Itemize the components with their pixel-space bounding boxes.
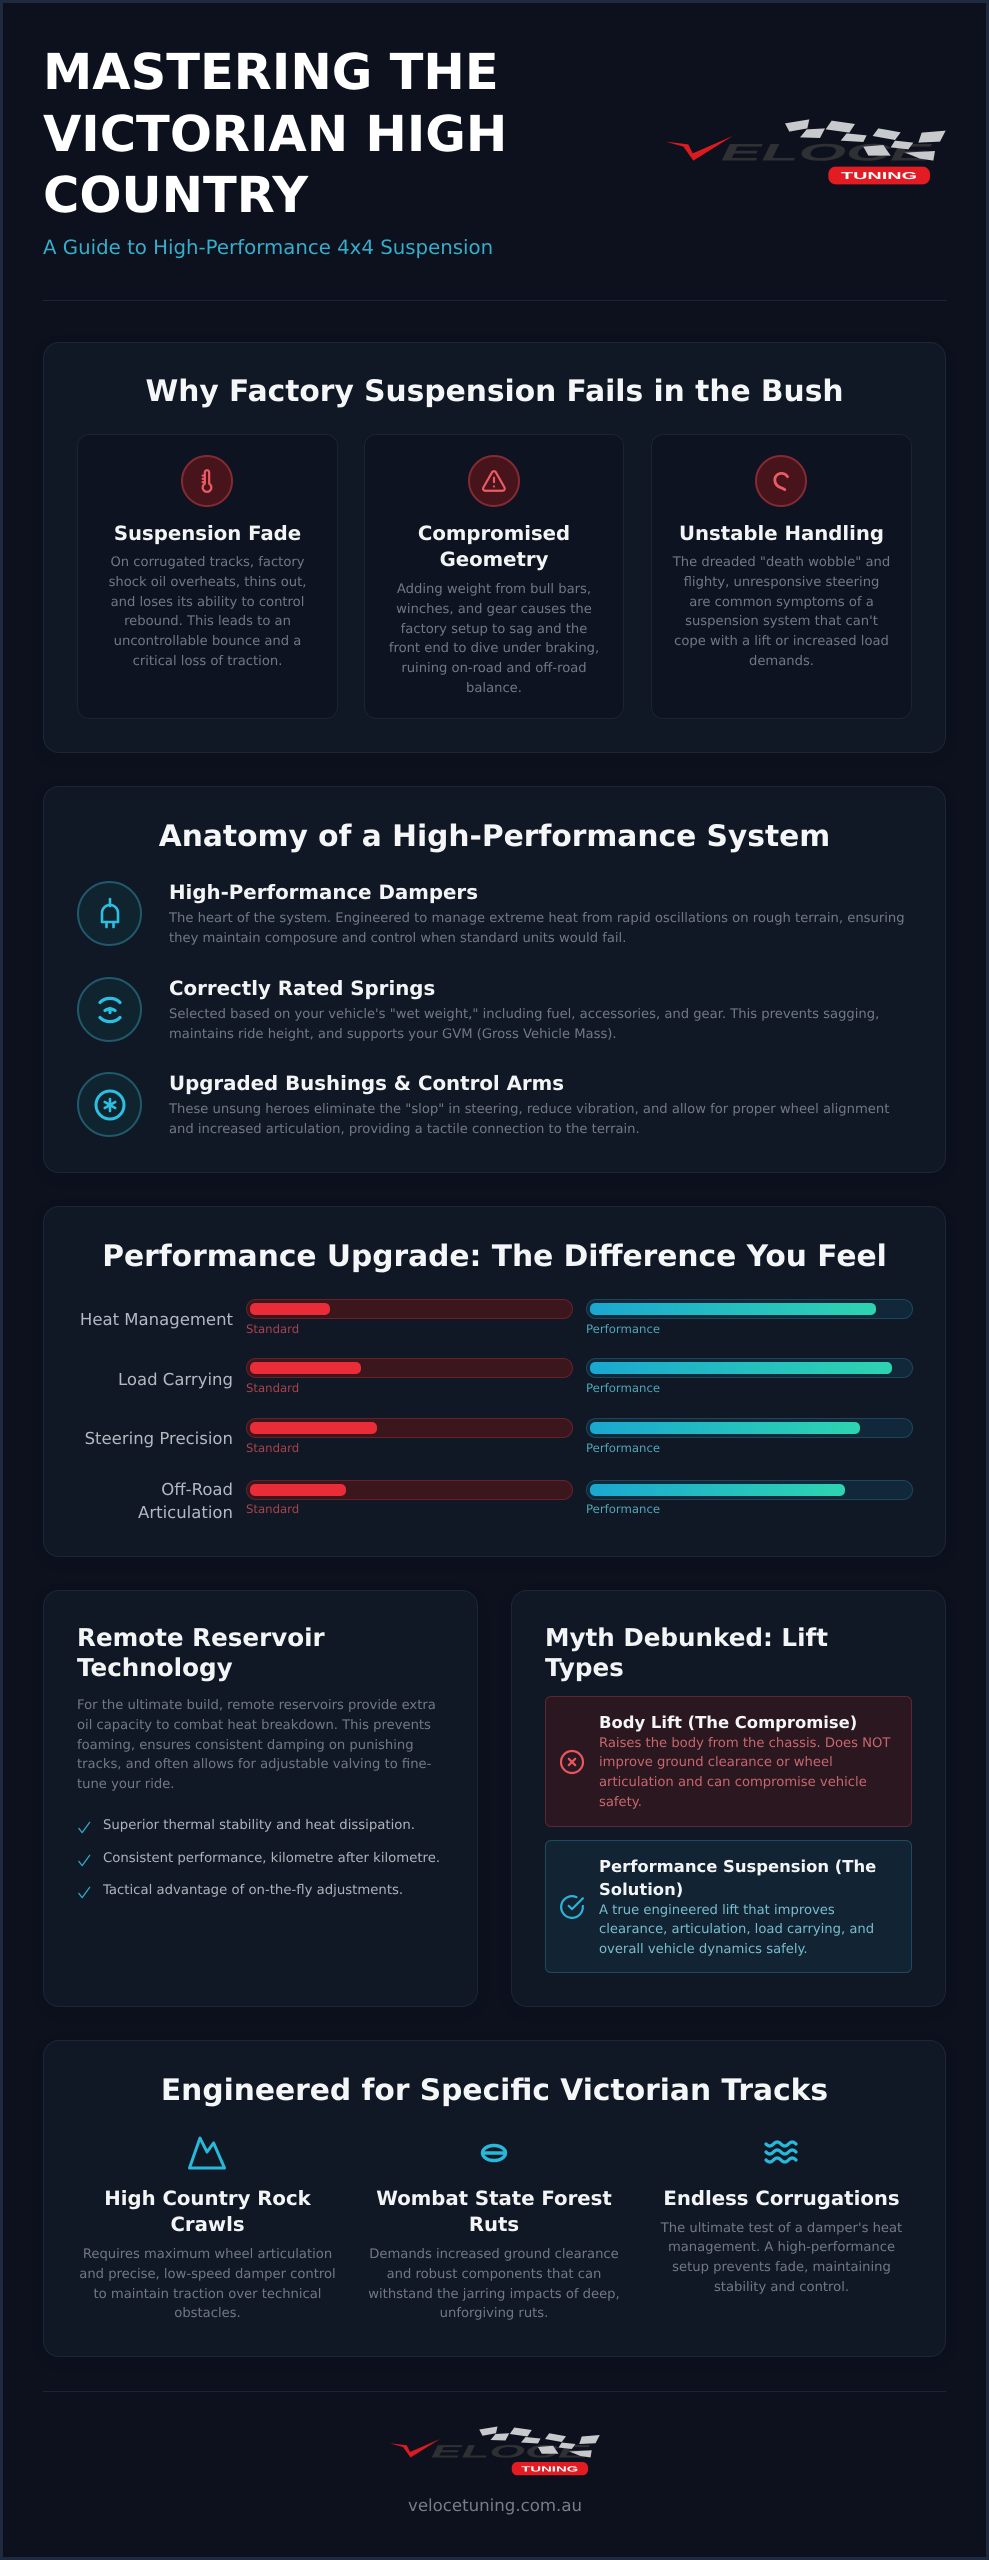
item title: Correctly Rated Springs [169,977,435,1000]
item text [169,1007,879,1042]
card text: critical loss of traction. [133,654,282,669]
callout text [599,1902,874,1957]
column text: stability and control. [714,2280,849,2295]
header logo [666,119,946,184]
heading: Performance Upgrade: The Difference You Feel [102,1239,887,1274]
bar row: off-road articulation [138,1480,913,1522]
card title [418,522,570,571]
column text: obstacles. [174,2306,241,2321]
paragraph: For the ultimate build, remote reservoirs provide extra [77,1698,436,1713]
icon: check circle [560,1895,584,1919]
standard bar [246,1358,573,1378]
panel: why factory suspension fails [43,342,946,753]
performance caption: Performance [586,1441,660,1455]
item text: and increased articulation, providing a tactile connection to the terrain. [169,1122,640,1137]
column title: Wombat State Forest [376,2187,612,2210]
card title: Suspension Fade [114,522,301,545]
header title: VICTORIAN HIGH [43,105,507,163]
standard bar [246,1299,573,1319]
card text [672,555,890,669]
callout text [599,1736,890,1810]
row label: Steering Precision [85,1429,233,1448]
column text: and precise, low-speed damper control [79,2267,336,2282]
column title: Endless Corrugations [663,2187,900,2210]
callout title: Performance Suspension (The [599,1857,876,1876]
card text: suspension system that can't [685,614,878,629]
list item 3: Tactical advantage of on-the-fly adjustments. [103,1883,403,1898]
performance caption: Performance [586,1322,660,1336]
callout text: Raises the body from the chassis. Does NOT [599,1736,890,1750]
footer logo: TUNING [521,2464,578,2472]
card title: Geometry [440,548,548,571]
column text: management. A high-performance [668,2240,895,2255]
column text: The ultimate test of a damper's heat [661,2220,902,2236]
standard caption: Standard [246,1381,299,1395]
footer logo: ELOCE [431,2441,590,2461]
performance bar [586,1299,913,1319]
icon: bushing [77,1072,142,1137]
standard bar [246,1418,573,1438]
paragraph: tune your ride. [77,1777,174,1792]
card text: flighty, unresponsive steering [684,575,879,590]
item text: These unsung heroes eliminate the "slop" in steering, reduce vibration, and allow for proper wheel alignment [169,1102,889,1117]
standard caption: Standard [246,1502,299,1516]
footer logo [390,2426,600,2476]
performance caption: Performance [586,1502,660,1516]
card text: On corrugated tracks, factory [110,555,305,570]
icon: rut lens [480,2144,508,2162]
card text: ruining on-road and off-road [401,661,587,676]
card text: and loses its ability to control [111,594,304,610]
callout text: A true engineered lift that improves [599,1902,835,1918]
icon: thermometer [181,455,233,507]
standard caption: Standard [246,1441,299,1455]
card text: are common symptoms of a [689,594,874,610]
heading: Why Factory Suspension Fails in the Bush [145,374,844,409]
card text: rebound. This leads to an [124,614,291,629]
card title: Unstable Handling [679,522,884,545]
item title: High-Performance Dampers [169,881,478,904]
column text: Demands increased ground clearance [369,2247,619,2262]
column text [79,2247,336,2321]
panel: performance upgrade bars [43,1206,946,1557]
header title: MASTERING THE [43,43,499,101]
card text [389,582,599,696]
card text: front end to dive under braking, [389,641,599,656]
column text: unforgiving ruts. [440,2306,548,2321]
card: compromised geometry [364,434,624,719]
card text: shock oil overheats, thins out, [109,575,306,590]
column title [376,2187,612,2236]
performance bar [586,1418,913,1438]
footer url: velocetuning.com.au [408,2496,582,2515]
panel: anatomy of a high-performance system [43,786,946,1173]
header subtitle: A Guide to High-Performance 4x4 Suspension [43,236,493,259]
bar row: heat management [80,1299,913,1336]
callout text: clearance, articulation, load carrying, and [599,1922,874,1937]
bar row: steering precision [85,1418,913,1455]
item text [169,911,905,946]
card text: The dreaded "death wobble" and [673,555,890,570]
column title: High Country Rock [104,2187,311,2210]
item: springs [77,977,879,1042]
row label: Load Carrying [118,1370,233,1389]
card text: cope with a lift or increased load [674,634,889,649]
icon: wobble arc [755,455,807,507]
heading: Technology [77,1653,233,1682]
icon: spring [77,977,142,1042]
icon: waves [764,2140,798,2164]
performance bar [586,1480,913,1500]
callout title: Solution) [599,1880,683,1899]
column: rock crawls [79,2136,336,2321]
row label [138,1480,233,1522]
column: corrugations [660,2140,902,2295]
performance bar [586,1358,913,1378]
callout: performance suspension [545,1840,912,1973]
heading: Anatomy of a High-Performance System [159,819,830,854]
column: wombat ruts [368,2144,620,2321]
item: bushings [77,1072,890,1137]
callout text: overall vehicle dynamics safely. [599,1942,808,1957]
heading: Types [545,1653,624,1682]
list item 2: Consistent performance, kilometre after kilometre. [103,1851,440,1866]
card text: Adding weight from bull bars, [397,582,591,597]
card: unstable handling [651,434,912,719]
card text [109,555,306,669]
paragraph: tracks, and often allows for adjustable valving to fine- [77,1757,431,1772]
list item 1: Superior thermal stability and heat dissipation. [103,1818,415,1833]
panel: engineered for victorian tracks [43,2040,946,2357]
column text [660,2220,902,2295]
item: dampers [77,881,905,946]
heading: Engineered for Specific Victorian Tracks [161,2073,828,2108]
column text [368,2247,620,2321]
card text: winches, and gear causes the [396,602,592,617]
card text: balance. [466,681,522,696]
standard caption: Standard [246,1322,299,1336]
row label: Articulation [138,1503,233,1522]
card: suspension fade [77,434,338,719]
callout text: safety. [599,1795,642,1810]
card title: Compromised [418,522,570,545]
heading: Myth Debunked: Lift [545,1623,828,1652]
header logo: ELOCE [721,139,932,166]
bar row: load carrying [118,1358,913,1395]
performance caption: Performance [586,1381,660,1395]
callout: body lift [545,1696,912,1827]
item title: Upgraded Bushings & Control Arms [169,1072,564,1095]
panel: myth debunked [511,1590,946,2007]
column text: setup prevents fade, maintaining [672,2260,891,2275]
icon: x circle [560,1750,584,1774]
panel: remote reservoir technology [43,1590,478,2007]
item text: The heart of the system. Engineered to manage extreme heat from rapid oscillations on rough terrain, ensuring [169,911,905,926]
column title: Ruts [469,2213,519,2236]
column text: and robust components that can [387,2267,601,2282]
item text [169,1102,890,1137]
heading [77,1623,325,1682]
row label: Off-Road [161,1480,233,1499]
callout text: improve ground clearance or wheel [599,1755,833,1770]
heading: Remote Reservoir [77,1623,325,1652]
header title [43,43,507,224]
column text: withstand the jarring impacts of deep, [368,2286,620,2302]
card text: factory setup to sag and the [401,622,587,636]
paragraph: foaming, ensures consistent damping on punishing [77,1738,414,1752]
standard bar [246,1480,573,1500]
item text: maintains ride height, and supports your GVM (Gross Vehicle Mass). [169,1027,617,1042]
item text: they maintain composure and control when standard units would fail. [169,931,626,946]
paragraph [77,1698,436,1792]
row label: Heat Management [80,1310,233,1329]
icon: warning triangle [468,455,520,507]
callout title: Body Lift (The Compromise) [599,1712,857,1732]
column text: to maintain traction over technical [94,2286,321,2302]
column title: Crawls [170,2213,245,2236]
callout title [599,1857,876,1899]
header title: COUNTRY [43,166,308,224]
card text: demands. [749,654,814,669]
heading [545,1623,828,1682]
column title [104,2187,311,2236]
card text: uncontrollable bounce and a [114,634,301,649]
item text: Selected based on your vehicle's "wet weight," including fuel, accessories, and gear. This prevents sagging, [169,1007,879,1022]
column text: Requires maximum wheel articulation [83,2247,332,2262]
icon: damper [77,881,142,946]
icon: mountain [188,2136,226,2170]
callout text: articulation and can compromise vehicle [599,1775,867,1790]
header logo: TUNING [841,170,917,181]
paragraph: oil capacity to combat heat breakdown. This prevents [77,1718,431,1733]
